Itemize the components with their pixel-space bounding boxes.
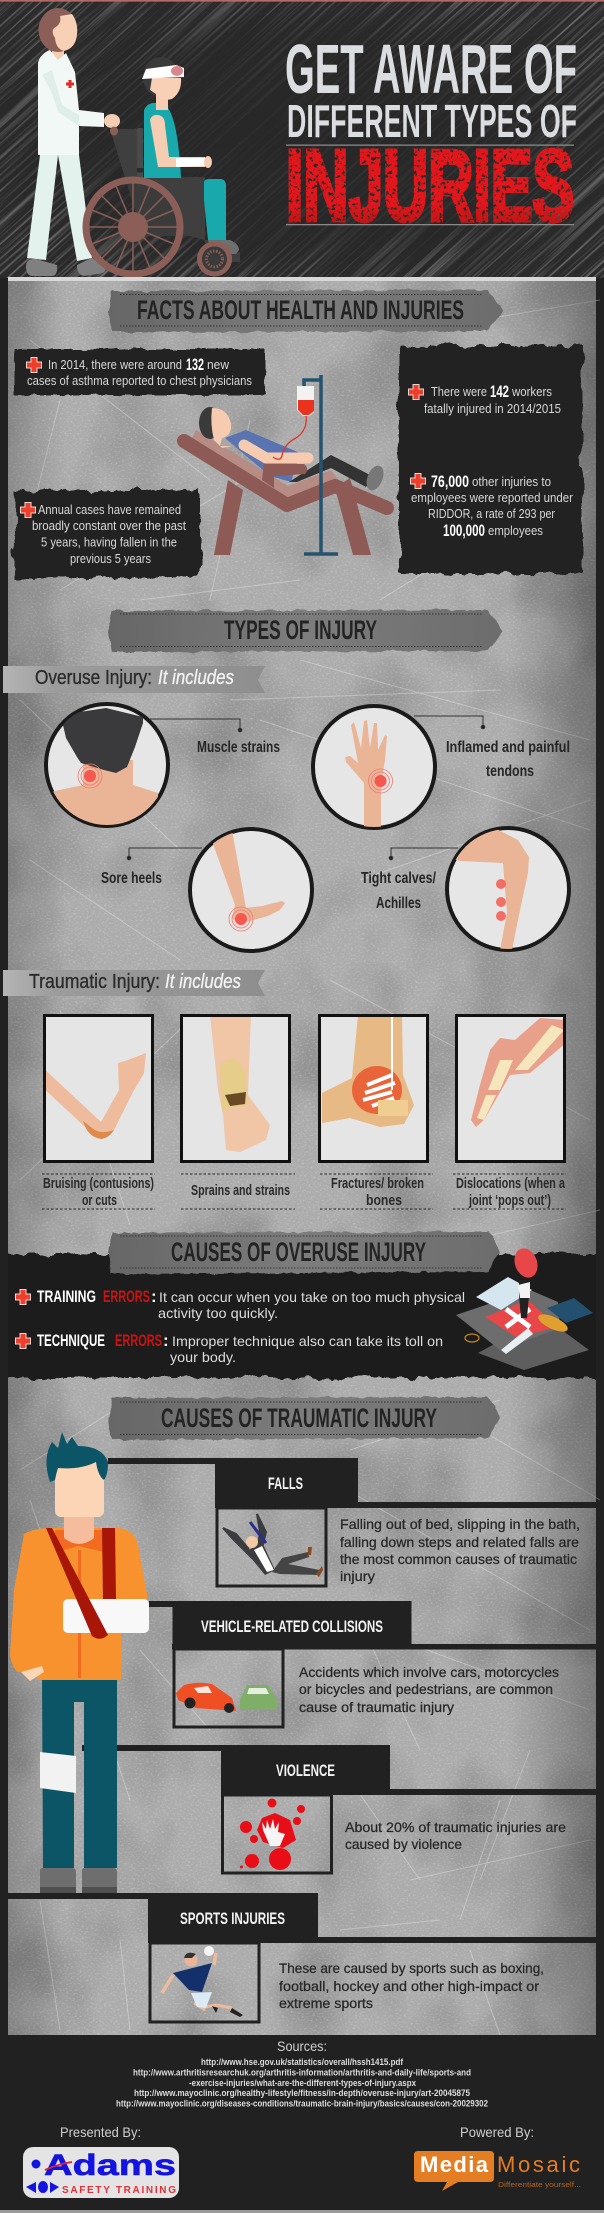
heading banner: causes of overuse injury: CAUSES OF OVERUSE INJURY: [171, 1237, 426, 1267]
header background: [0, 0, 604, 278]
ribbon: traumatic injury: Traumatic Injury:: [29, 971, 160, 993]
heading banner: types of injury: TYPES OF INJURY: [224, 615, 377, 645]
chair cushion: [192, 430, 340, 500]
fact box: workers and RIDDOR injuries: [399, 346, 582, 574]
illustration: injured man with arm cast: [10, 1432, 149, 1893]
captions: Fractures/ broken: [331, 1175, 424, 1192]
description: [340, 1516, 580, 1584]
icon: falling man: [217, 1508, 326, 1586]
sources: [116, 2038, 488, 2110]
sources: -exercise-injuries/what-are-the-different-types-of-injury.aspx: [189, 2078, 417, 2089]
logo: Adams Safety Training: SAFETY TRAINING: [62, 2185, 176, 2196]
section: falls: [215, 1458, 580, 1586]
fact box: workers and RIDDOR injuries: other injuries to: [472, 474, 551, 489]
captions: [43, 1175, 565, 1209]
circle: sore heels (foot): [190, 829, 312, 951]
large wheel: [86, 180, 180, 274]
legs of patient: [289, 455, 374, 487]
frame: fractures: [320, 1015, 428, 1162]
heading banner: causes of traumatic injury: CAUSES OF TRAUMATIC INJURY: [161, 1403, 437, 1433]
fact box: workers and RIDDOR injuries: There were: [431, 384, 487, 399]
blood: [298, 400, 314, 415]
illustration: doctor pushing patient in wheelchair: [26, 8, 240, 276]
fact box: 132 new asthma cases: cases of asthma reported to chest physicians: [27, 373, 252, 388]
frame: dislocations: [456, 1016, 566, 1162]
arm cast: [63, 1599, 149, 1633]
shoe: [363, 463, 387, 493]
heading banner: facts about health and injuries: [108, 290, 503, 332]
section: sports injuries: SPORTS INJURIES: [180, 1909, 285, 1928]
presented by: Presented By:: [60, 2124, 141, 2140]
fact box: 132 new asthma cases: new: [207, 357, 230, 372]
strap: [102, 1528, 116, 1600]
label: inflamed and painful tendons: Inflamed and painful: [446, 739, 570, 756]
cause: training errors: It can occur when you take on too much physical: [159, 1289, 465, 1305]
circle: inflamed tendons (hand): [313, 706, 435, 830]
fact box: workers and RIDDOR injuries: 76,000: [431, 472, 469, 491]
logo: Adams Safety Training: [23, 2147, 179, 2198]
cause: training errors: ERRORS: [103, 1287, 150, 1306]
arm: [244, 445, 308, 458]
cause: technique errors: ERRORS: [115, 1331, 162, 1350]
footer: [0, 2035, 604, 2213]
fact box: annual cases constant: previous 5 years: [70, 551, 151, 566]
captions: Sprains and strains: [191, 1182, 290, 1199]
shoes: [40, 1868, 117, 1893]
description: Falling out of bed, slipping in the bath,: [340, 1516, 580, 1532]
fact box: 132 new asthma cases: In 2014, there were around: [48, 357, 182, 372]
cause: technique errors: TECHNIQUE: [37, 1331, 105, 1350]
illustration: patient on reclining chair with IV drip: [184, 375, 387, 555]
cause: technique errors: :: [163, 1331, 169, 1350]
cause: technique errors: Improper technique also can take its toll on: [172, 1333, 443, 1349]
leg bandage: [40, 1752, 76, 1793]
fact box: annual cases constant: [15, 490, 200, 577]
ribbon: traumatic injury: [3, 970, 265, 996]
cause: technique errors: [16, 1331, 443, 1365]
sources: http://www.mayoclinic.org/diseases-conditions/traumatic-brain-injury/basics/causes/con-20029302: [116, 2098, 488, 2110]
ribbon: overuse injury: Overuse Injury:: [35, 667, 152, 689]
logo: Media Mosaic: [414, 2151, 581, 2191]
icon: blood splatter with hand: [222, 1795, 332, 1873]
face: [55, 1462, 104, 1517]
description: falling down steps and related falls are: [340, 1534, 579, 1550]
shirt: [10, 1528, 148, 1680]
head: [199, 407, 221, 439]
ribbon: traumatic injury: It includes: [165, 971, 241, 993]
dark band: causes of overuse injury: [0, 1254, 604, 1378]
logo: Media Mosaic: Differentiate yourself...: [498, 2182, 581, 2189]
sources: Sources:: [277, 2038, 327, 2054]
heading banner: causes of overuse injury: [108, 1232, 500, 1274]
fact box: 132 new asthma cases: [15, 349, 265, 395]
section: sports injuries: [148, 1893, 544, 2022]
section: violence: [221, 1745, 566, 1873]
description: caused by violence: [345, 1836, 462, 1852]
description: These are caused by sports such as boxing,: [279, 1960, 544, 1976]
description: injury: [340, 1568, 375, 1584]
circle: tight calves (leg): [447, 825, 569, 950]
fact box: annual cases constant: 5 years, having fallen in the: [41, 534, 177, 550]
sources: http://www.arthritisresearchuk.org/arthritis-information/arthritis-and-daily-life/sports-and: [133, 2068, 471, 2078]
caption dashes: [42, 1174, 566, 1209]
shirt: [225, 430, 300, 482]
section: violence: VIOLENCE: [276, 1761, 335, 1780]
description: extreme sports: [279, 1995, 373, 2011]
fact box: workers and RIDDOR injuries: 100,000: [443, 521, 485, 540]
description: or bicycles and pedestrians, are common: [299, 1681, 553, 1697]
connector lines: [127, 716, 485, 860]
main panel background: [8, 277, 600, 2035]
label: tight calves / achilles: Tight calves/: [361, 870, 436, 887]
patient: [142, 57, 239, 254]
cause: technique errors: your body.: [170, 1349, 236, 1365]
IV tube: [273, 415, 306, 459]
icon: handball player: [150, 1943, 259, 2022]
label: inflamed and painful tendons: [446, 739, 570, 780]
wheelchair frame: [110, 126, 240, 262]
circle: muscle strains (neck): [46, 704, 168, 830]
IV bag: [297, 386, 314, 416]
sources: http://www.mayoclinic.org/healthy-lifestyle/fitness/in-depth/overuse-injury/art-20045875: [134, 2088, 471, 2099]
section: falls: FALLS: [268, 1474, 303, 1493]
cause: training errors: activity too quickly.: [158, 1305, 278, 1321]
fact box: annual cases constant: broadly constant over the past: [32, 518, 186, 533]
label: sore heels: Sore heels: [101, 870, 162, 887]
frame: bruising: [40, 1016, 152, 1162]
captions: joint ‘pops out’): [468, 1192, 551, 1209]
fact box: workers and RIDDOR injuries: employees: [488, 523, 543, 538]
description: About 20% of traumatic injuries are: [345, 1819, 566, 1835]
captions: or cuts: [82, 1192, 117, 1209]
collar and placket: [55, 1530, 103, 1678]
heading banner: causes of traumatic injury: [108, 1397, 500, 1440]
trousers: [42, 1677, 117, 1868]
illustration: first aid isometric: [456, 1245, 593, 1370]
description: Accidents which involve cars, motorcycles: [299, 1664, 559, 1680]
logo: Media Mosaic: Media: [420, 2152, 489, 2177]
label: inflamed and painful tendons: tendons: [486, 763, 534, 780]
icon: car crash: [174, 1649, 283, 1727]
section frame lines: [8, 1458, 596, 1943]
description: [279, 1960, 544, 2011]
chair frame: [184, 441, 387, 508]
captions: Bruising (contusions): [43, 1175, 154, 1192]
powered by: Powered By:: [460, 2124, 534, 2140]
armrest: [262, 464, 307, 488]
fact box: workers and RIDDOR injuries: employees were reported under: [411, 490, 574, 505]
description: [299, 1664, 559, 1715]
captions: bones: [366, 1192, 402, 1209]
fact box: workers and RIDDOR injuries: 142: [490, 382, 509, 401]
description: [345, 1819, 566, 1852]
small wheel: [200, 244, 230, 274]
heading banner: types of injury: [108, 610, 503, 652]
logo: Media Mosaic: Mosaic: [497, 2152, 580, 2177]
section: vehicle-related collisions: [172, 1601, 559, 1727]
frame: sprains: [182, 1015, 290, 1162]
fact box: workers and RIDDOR injuries: fatally injured in 2014/2015: [424, 401, 561, 416]
neck: [64, 1510, 94, 1544]
title: [285, 30, 577, 242]
description: cause of traumatic injury: [299, 1699, 454, 1715]
IV pole: [304, 375, 338, 554]
hair: [46, 1432, 108, 1482]
ribbon: overuse injury: [3, 666, 265, 693]
chair legs: [214, 478, 371, 555]
doctor: [26, 8, 120, 276]
fact box: annual cases constant: Annual cases have remained: [38, 502, 181, 517]
fact box: workers and RIDDOR injuries: workers: [511, 384, 552, 399]
captions: Dislocations (when a: [456, 1175, 565, 1192]
sling strap: [46, 1528, 108, 1639]
sources: http://www.hse.gov.uk/statistics/overall/hssh1415.pdf: [201, 2057, 404, 2068]
section: vehicle-related collisions: VEHICLE-RELATED COLLISIONS: [201, 1617, 383, 1636]
logo: Adams Safety Training: Adams: [44, 2149, 176, 2182]
cause: training errors: :: [151, 1287, 157, 1306]
hand: [21, 1666, 44, 1681]
description: football, hockey and other high-impact or: [279, 1978, 539, 1994]
cause: training errors: [16, 1287, 465, 1321]
label: muscle strains: Muscle strains: [197, 739, 280, 756]
description: the most common causes of traumatic: [340, 1551, 577, 1567]
ribbon: overuse injury: It includes: [158, 667, 234, 689]
label: tight calves / achilles: [361, 870, 436, 912]
fact box: 132 new asthma cases: 132: [186, 355, 204, 374]
fact box: workers and RIDDOR injuries: RIDDOR, a rate of 293 per: [428, 506, 556, 521]
label: tight calves / achilles: Achilles: [376, 895, 421, 912]
cause: training errors: TRAINING: [37, 1287, 96, 1306]
